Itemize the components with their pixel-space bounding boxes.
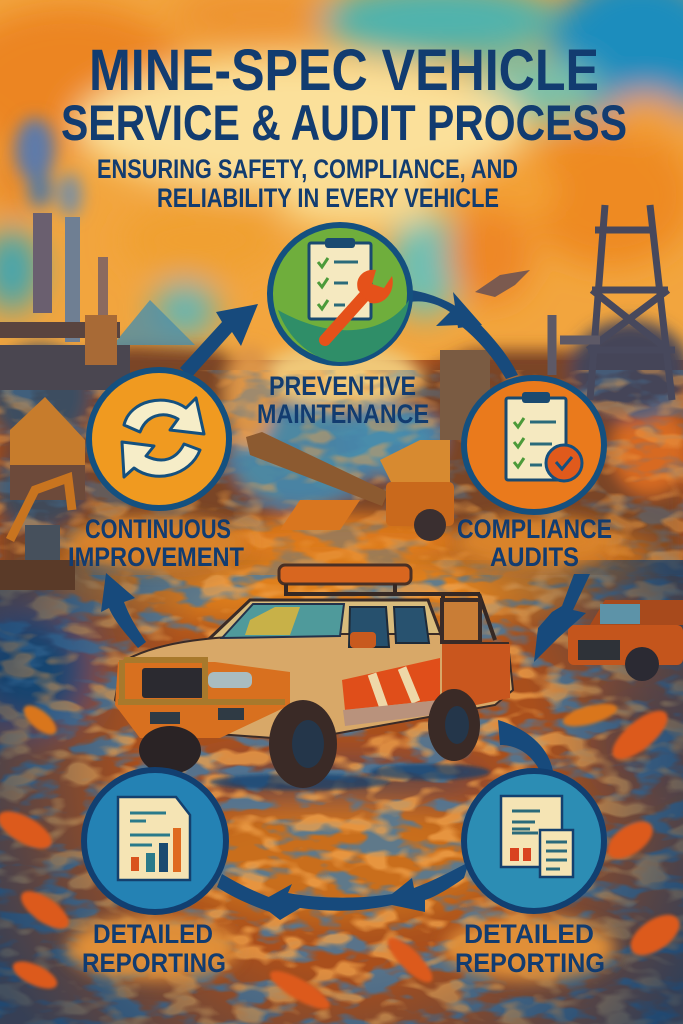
- cab: [208, 600, 445, 645]
- subtitle: [97, 154, 518, 213]
- label: detailed reporting left: DETAILED: [93, 919, 213, 949]
- label: compliance audits: [457, 514, 612, 572]
- mid-ground haze: [0, 320, 683, 590]
- label: detailed reporting left: REPORTING: [82, 948, 226, 978]
- label: preventive maintenance: PREVENTIVE: [269, 371, 416, 401]
- vignette: [0, 560, 683, 1024]
- icon: compliance audits: [464, 378, 604, 512]
- label: detailed reporting right: DETAILED: [464, 919, 594, 949]
- side windows: [349, 607, 389, 647]
- subtitle: RELIABILITY IN EVERY VEHICLE: [157, 183, 499, 213]
- icon: detailed reporting left: [84, 770, 226, 912]
- truck right: [568, 600, 683, 681]
- title: MINE-SPEC VEHICLE: [89, 38, 599, 103]
- label: detailed reporting right: REPORTING: [455, 948, 605, 978]
- ground: [0, 536, 683, 1024]
- arrow: bumper loop: [498, 720, 553, 771]
- subtitle: ENSURING SAFETY, COMPLIANCE, AND: [97, 154, 518, 184]
- label: detailed reporting right: [455, 919, 605, 978]
- arrow: reporting to continuous improvement: [101, 573, 146, 648]
- rear bed: [442, 644, 510, 712]
- shadow under vehicle: [210, 764, 490, 790]
- icon: detailed reporting right: [464, 771, 604, 911]
- distant aircraft: [475, 270, 530, 297]
- windshield: [222, 604, 344, 638]
- rock strokes: [0, 699, 683, 1016]
- roof rack: [285, 584, 495, 640]
- roof light bar: [279, 565, 411, 584]
- label: preventive maintenance: MAINTENANCE: [257, 399, 429, 429]
- label: continuous improvement: CONTINUOUS: [85, 514, 231, 544]
- smoke plumes: [15, 118, 82, 217]
- title: [61, 38, 627, 151]
- front bumper and grille: [115, 662, 290, 738]
- arrow: continuous improvement to preventive maintenance: [180, 304, 258, 378]
- arrow: right reporting to left reporting: [217, 862, 469, 920]
- label: compliance audits: COMPLIANCE: [457, 514, 612, 544]
- arrow: compliance audits to reporting: [534, 574, 590, 662]
- wheels: [139, 726, 201, 774]
- cycle arrows: [101, 290, 590, 920]
- label: continuous improvement: [68, 514, 244, 572]
- label halos: [66, 516, 615, 980]
- arrow: preventive maintenance to compliance audits: [410, 290, 518, 379]
- smokestacks and left plant: [0, 213, 195, 500]
- headframe tower right: [552, 205, 675, 400]
- icon: continuous improvement: [89, 370, 229, 508]
- excavator left: [0, 478, 75, 590]
- conveyor and dump truck: [246, 350, 490, 541]
- label: detailed reporting left: [82, 919, 226, 978]
- door stripes: [342, 658, 440, 710]
- label: compliance audits: AUDITS: [490, 542, 579, 572]
- label: continuous improvement: IMPROVEMENT: [68, 542, 244, 572]
- label: preventive maintenance: [257, 371, 429, 429]
- icon: preventive maintenance: [270, 225, 410, 363]
- body: [115, 634, 513, 740]
- vehicle: [115, 565, 513, 788]
